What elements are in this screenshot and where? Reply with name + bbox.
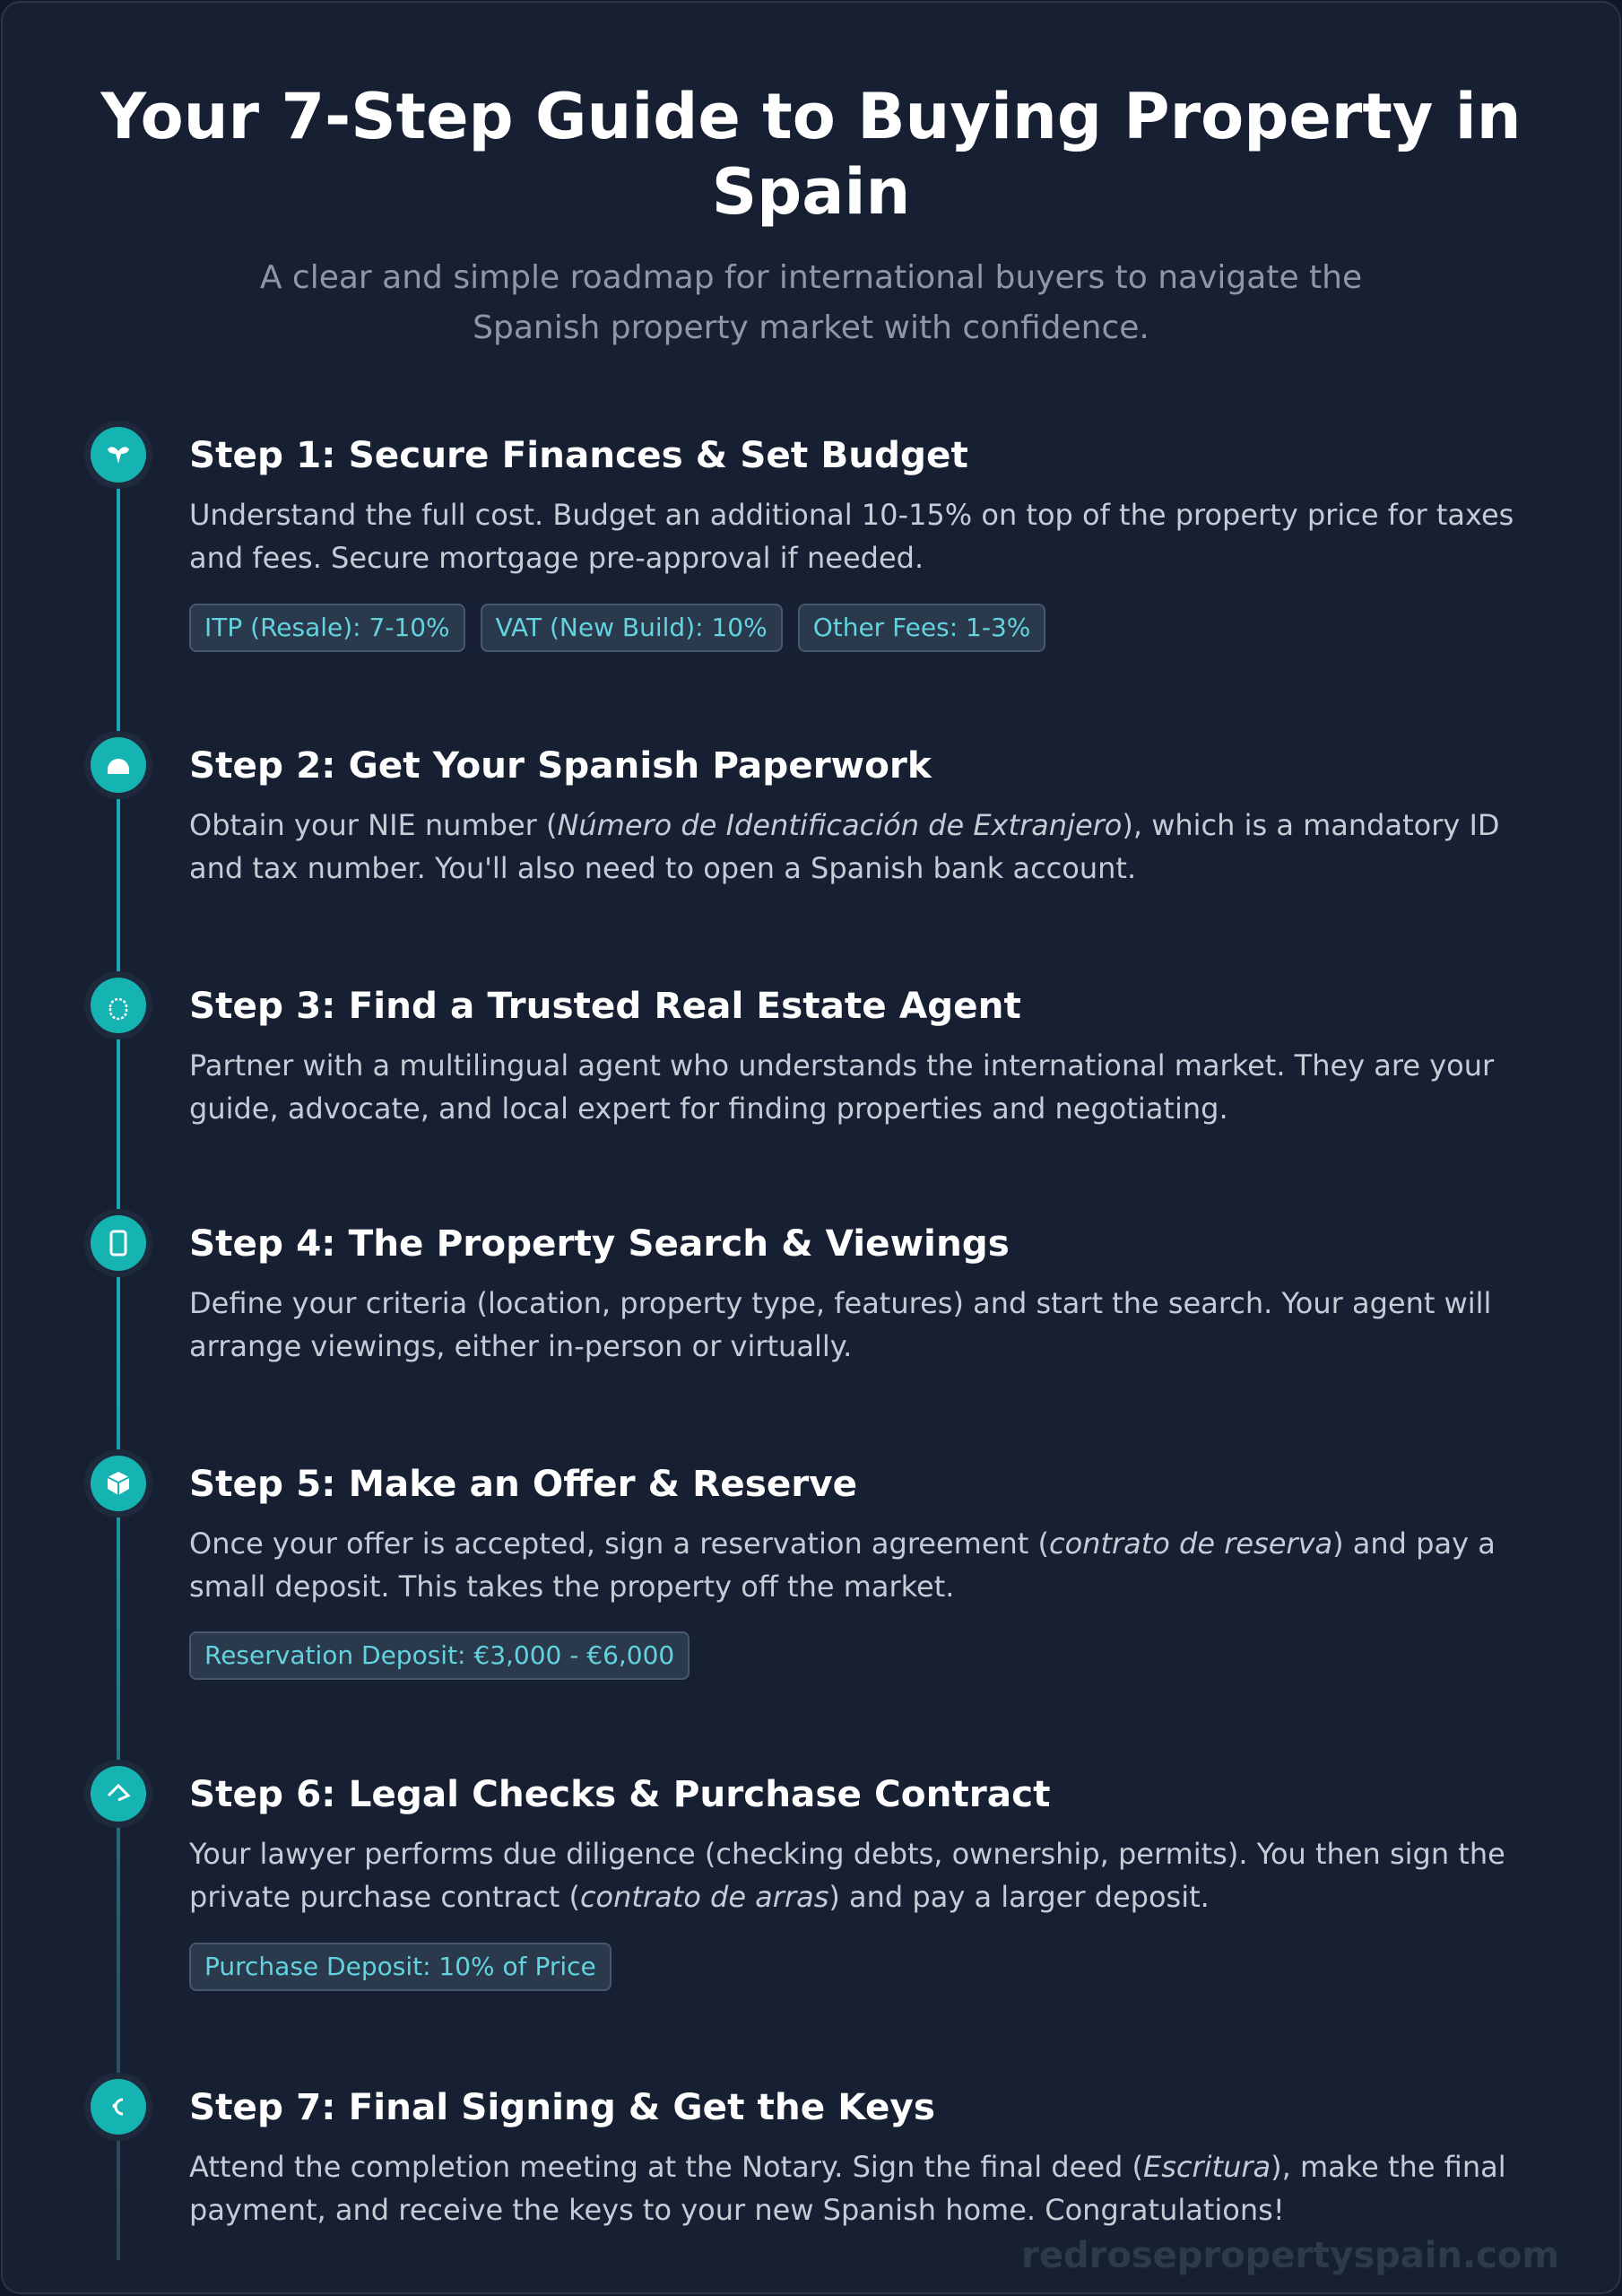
tags: step 1: ITP (Resale): 7-10%	[204, 613, 450, 642]
icon: step 7	[84, 2073, 152, 2141]
step 1	[84, 421, 1514, 652]
subtitle	[260, 259, 1362, 346]
text: step 4: Define your criteria (location, property type, features) and start the search. Your agent will arrange viewings, either in-person or virtually.	[189, 1286, 1491, 1363]
text: step 6: Your lawyer performs due diligence (checking debts, ownership, permits). You then sign the private purchase contract (contrato de arras) and pay a larger deposit.	[189, 1837, 1505, 1914]
heading: step 5: Step 5: Make an Offer & Reserve	[189, 1462, 857, 1505]
heading: step 3: Step 3: Find a Trusted Real Estate Agent	[189, 984, 1021, 1027]
heading: step 7: Step 7: Final Signing & Get the Keys	[189, 2085, 935, 2128]
icon: step 2	[84, 731, 152, 799]
icon: step 4	[84, 1209, 152, 1277]
text: step 5: Once your offer is accepted, sign a reservation agreement (contrato de reserva) and pay a small deposit. This takes the property off the market.	[189, 1526, 1496, 1604]
step 5	[84, 1449, 1496, 1680]
text: step 2: Obtain your NIE number (Número de Identificación de Extranjero), which is a mandatory ID and tax number. You'll also need to open a Spanish bank account.	[189, 808, 1500, 885]
heading: step 6: Step 6: Legal Checks & Purchase Contract	[189, 1772, 1050, 1815]
step 3	[84, 971, 1494, 1126]
tags: step 1: Other Fees: 1-3%	[813, 613, 1030, 642]
text: step 3: Partner with a multilingual agent who understands the international market. They are your guide, advocate, and local expert for finding properties and negotiating.	[189, 1048, 1494, 1126]
icon: step 5	[84, 1449, 152, 1518]
timeline line	[117, 466, 120, 2260]
icon: step 6	[84, 1760, 152, 1828]
title: Spain	[712, 155, 910, 229]
step 2	[84, 731, 1500, 885]
title: Your 7-Step Guide to Buying Property in	[100, 80, 1522, 153]
tags: step 1: VAT (New Build): 10%	[496, 613, 768, 642]
step 7	[84, 2073, 1506, 2227]
icon: step 1	[84, 421, 152, 489]
step 6	[84, 1760, 1505, 1991]
heading: step 2: Step 2: Get Your Spanish Paperwork	[189, 744, 932, 787]
step 4	[84, 1209, 1491, 1363]
tag: step 5: Reservation Deposit: €3,000 - €6,000	[204, 1640, 674, 1670]
icon: step 3	[84, 971, 152, 1039]
tags: step 1	[189, 604, 1045, 652]
subtitle: A clear and simple roadmap for international buyers to navigate the	[260, 259, 1362, 296]
heading: step 1: Step 1: Secure Finances & Set Budget	[189, 433, 968, 476]
watermark: redrosepropertyspain.com	[1021, 2235, 1559, 2276]
heading: step 4: Step 4: The Property Search & Viewings	[189, 1222, 1010, 1265]
title	[100, 80, 1522, 229]
text: step 7: Attend the completion meeting at the Notary. Sign the final deed (Escritura), make the final payment, and receive the keys to your new Spanish home. Congratulations!	[189, 2150, 1506, 2227]
tag: step 6: Purchase Deposit: 10% of Price	[204, 1952, 596, 1981]
text: step 1: Understand the full cost. Budget an additional 10-15% on top of the property price for taxes and fees. Secure mortgage pre-approval if needed.	[189, 498, 1514, 575]
subtitle: Spanish property market with confidence.	[473, 309, 1149, 346]
